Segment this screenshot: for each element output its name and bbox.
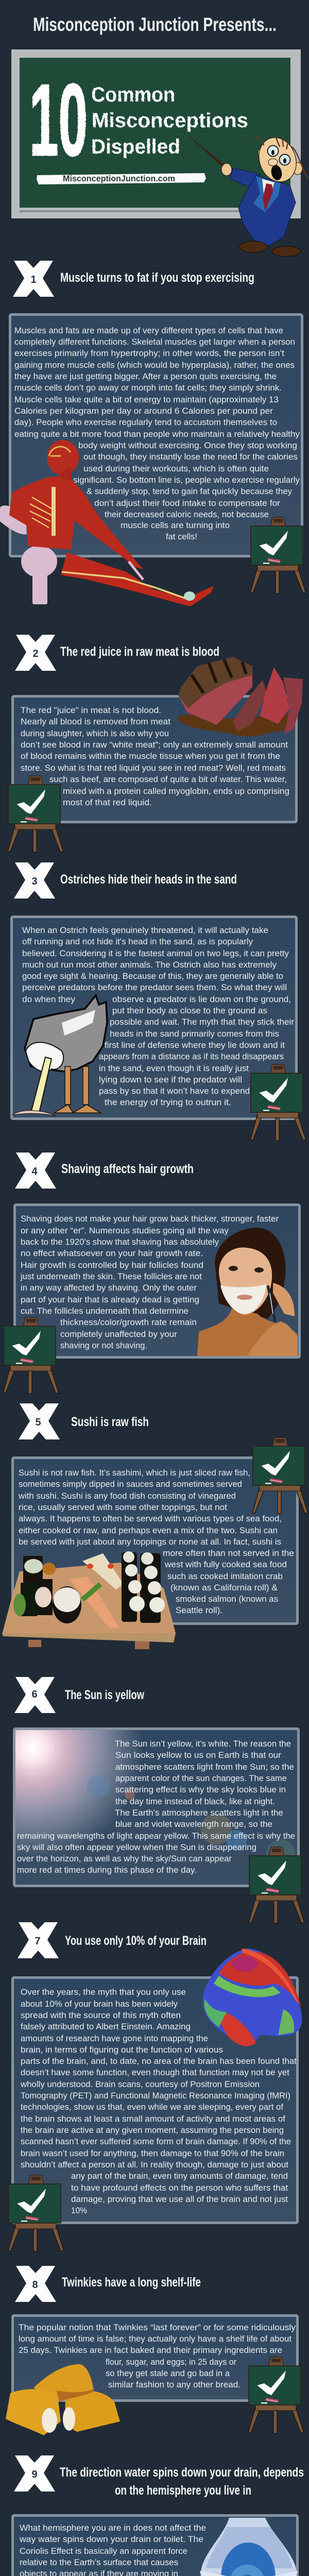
board heading bbox=[91, 83, 248, 158]
text 3: When an Ostrich feels genuinely threatened, it will actually take bbox=[22, 925, 268, 935]
text 1: Muscles and fats are made up of very different types of cells that have bbox=[14, 326, 283, 335]
text 8: so they get stale and go bad in a bbox=[106, 2368, 230, 2378]
text 4: completely unaffected by your bbox=[60, 1329, 177, 1339]
image: sun glare bbox=[15, 1730, 295, 1855]
text 2: Nearly all blood is removed from meat bbox=[21, 717, 170, 726]
text 7: shouldn’t affect a person at all. In reality though, damage to just about bbox=[21, 2160, 288, 2170]
board heading: Dispelled bbox=[91, 135, 180, 158]
text 1: eating quite a bit more food than people who maintain a relatively healthy bbox=[14, 429, 300, 439]
text 6: Sun looks yellow to us on Earth is that our bbox=[115, 1750, 281, 1760]
text 1: exercises primarily from hypertrophy; in other words, the person isn’t bbox=[14, 348, 284, 358]
panel 4 bbox=[14, 1205, 300, 1357]
panel 3 bbox=[11, 917, 297, 1119]
text 7: Tomography (PET) and Functional Magnetic Resonance Imaging (fMRI) bbox=[21, 2091, 290, 2100]
icon: professor with pointer bbox=[189, 132, 308, 257]
icon: easel check 2 bbox=[8, 776, 63, 852]
text 3: good eye sight & hearing. Because of this, they are generally able to bbox=[22, 971, 283, 981]
x mark 2: 2 bbox=[32, 648, 39, 659]
text 7: the brain are active at any given moment, assuming the person being bbox=[21, 2125, 284, 2135]
text 5: always. It happens to often be served with various types of sea food, bbox=[19, 1514, 282, 1523]
board number 10: 10 bbox=[29, 63, 88, 177]
text 1: significant. So bottom line is, people who exercise regularly bbox=[73, 475, 300, 485]
section 3: ostriches bbox=[11, 862, 306, 1141]
icon: easel check 6 bbox=[249, 1847, 304, 1923]
icon: easel check 7 bbox=[8, 2175, 64, 2251]
text 8 bbox=[19, 2323, 296, 2389]
text 6: more red at times during this phase of the day. bbox=[17, 1865, 197, 1875]
text 1: day). People who exercise regularly tend to accustom themselves to bbox=[14, 417, 277, 427]
panel 2 bbox=[12, 697, 297, 822]
text 3: the energy of trying to outrun it. bbox=[105, 1097, 231, 1107]
text 7: falsely attributed to Albert Einstein. Amazing bbox=[21, 2022, 191, 2031]
text 2: mixed with a protein called myoglobin, ends up comprising bbox=[63, 786, 289, 796]
panel 8 bbox=[12, 2315, 298, 2401]
x mark 1 bbox=[13, 261, 54, 297]
text 6: over the horizon, as well as why the sky/Sun can appear bbox=[17, 1854, 232, 1863]
text 6: scattering effect is why the sky looks blue in bbox=[115, 1785, 286, 1794]
text 5: be served with just about any toppings or none at all. In fact, sushi is bbox=[19, 1537, 281, 1547]
icon: easel check 3 bbox=[250, 1064, 306, 1141]
x mark 4: 4 bbox=[31, 1166, 38, 1177]
text 1: fat cells! bbox=[166, 532, 197, 541]
image: woman shaving bbox=[197, 1228, 298, 1356]
text 7: the brain shows at least a small amount of activity and most areas of bbox=[21, 2114, 285, 2124]
text 5: rice, usually served with some other toppings, but not bbox=[19, 1502, 227, 1512]
image: sushi board bbox=[2, 1551, 176, 1649]
x mark 6 bbox=[14, 1677, 56, 1713]
x mark 1: 1 bbox=[30, 274, 37, 285]
text 7: Over the years, the myth that you only use bbox=[21, 1987, 186, 1997]
section 7: brain bbox=[8, 1922, 302, 2251]
text 1: & suddenly stop, tend to gain fat quickly because they bbox=[87, 486, 292, 496]
text 2: The red "juice" in meat is not blood. bbox=[21, 705, 161, 715]
text 7: damage, proving that we use all of the brain and not just bbox=[71, 2194, 288, 2204]
text 6: apparent color of the sun changes. The same bbox=[115, 1773, 287, 1783]
section 5: sushi bbox=[2, 1403, 308, 1649]
x mark 7: 7 bbox=[35, 1936, 41, 1947]
icon: easel check 5 bbox=[252, 1437, 308, 1514]
x mark 9: 9 bbox=[31, 2469, 38, 2480]
section 6: sun bbox=[9, 1677, 304, 1923]
text 3: in the sand, even though it is really just bbox=[99, 1063, 249, 1073]
text 4: cut. The follicles underneath that determine bbox=[21, 1306, 188, 1316]
x mark 5: 5 bbox=[35, 1417, 41, 1428]
heading 1: Muscle turns to fat if you stop exercising bbox=[60, 270, 254, 285]
x mark 5 bbox=[19, 1403, 60, 1439]
x mark 6: 6 bbox=[31, 1689, 38, 1700]
text 2: most of that red liquid. bbox=[63, 798, 152, 807]
text 8: 25 days. Twinkies are in fact baked and their primary ingredients are bbox=[19, 2345, 282, 2355]
text 3: appears from a distance as if its head disappears bbox=[99, 1052, 284, 1061]
heading 5: Sushi is raw fish bbox=[71, 1415, 149, 1429]
text 3: off running and not hide it's head in the sand, as is popularly bbox=[22, 937, 253, 946]
panel 6 bbox=[14, 1729, 299, 1886]
panel 5 bbox=[12, 1458, 298, 1624]
text 4: thickness/color/growth rate remain bbox=[60, 1317, 197, 1327]
heading 4: Shaving affects hair growth bbox=[61, 1162, 194, 1176]
text 3: first line of defense where they lie down and it bbox=[105, 1040, 285, 1050]
text 5: such as cooked imitation crab bbox=[167, 1571, 283, 1581]
text 9: relative to the Earth’s surface that causes bbox=[20, 2557, 178, 2567]
x mark 3 bbox=[14, 862, 55, 899]
text 3: do when they bbox=[22, 994, 75, 1004]
text 7: any part of the brain, even tiny amounts of damage, tend bbox=[71, 2171, 288, 2181]
text 5: with sushi. Sushi is any food dish consisting of vinegared bbox=[18, 1491, 236, 1501]
text 7: wholly understood. Brain scans, courtesy of Positron Emission bbox=[20, 2079, 260, 2089]
text 7: scanned hasn’t ever suffered some form of brain damage. If 90% of the bbox=[21, 2137, 291, 2146]
heading 7: You use only 10% of your Brain bbox=[65, 1934, 207, 1948]
text 6: blue and violet wavelength range, so the bbox=[115, 1819, 272, 1829]
text 1: out though, they instantly lose the need for the calories bbox=[83, 452, 298, 462]
text 4: in any way affected by shaving. Only the outer bbox=[21, 1283, 197, 1293]
text 7: doesn’t have some function, even though that function may not be yet bbox=[21, 2067, 289, 2077]
text 6: atmosphere scatters light from the Sun; so the bbox=[115, 1762, 294, 1772]
text 3: lying down to see if the predator will bbox=[99, 1075, 242, 1084]
text 5: west with fully cooked sea food bbox=[164, 1560, 287, 1569]
text 3: perceive predators before the predator sees them. So what they will bbox=[22, 982, 287, 992]
text 3: heads in the sand primarily comes from this bbox=[110, 1029, 279, 1039]
section 4: shaving bbox=[3, 1153, 300, 1394]
chalkboard header bbox=[11, 49, 301, 218]
x mark 8: 8 bbox=[32, 2279, 38, 2291]
text 5: either cooked or raw, and perhaps even a mix of the two. Sushi can bbox=[19, 1526, 278, 1535]
text 4: Hair growth is controlled by hair follicles found bbox=[21, 1260, 203, 1270]
text 5: (known as California roll) & bbox=[170, 1583, 278, 1592]
text 6 bbox=[17, 1739, 295, 1875]
text 7: about 10% of your brain has been widely bbox=[21, 1999, 178, 2009]
text 6: remaining wavelengths of light appear yellow. This same effect is why the bbox=[17, 1831, 295, 1841]
section 2: red juice bbox=[8, 635, 303, 852]
x mark 9 bbox=[14, 2455, 55, 2492]
image: twinkies bbox=[6, 2364, 120, 2435]
text 7: amounts of research have gone into mapping the bbox=[21, 2033, 208, 2043]
text 4: shaving or not shaving. bbox=[60, 1341, 147, 1350]
icon: easel check 4 bbox=[3, 1317, 59, 1394]
section 8: twinkies bbox=[6, 2266, 304, 2435]
text 6: The Sun isn’t yellow, it’s white. The reason the bbox=[115, 1739, 291, 1749]
text 5: Sushi is not raw fish. It’s sashimi, which is just sliced raw fish, bbox=[19, 1468, 250, 1478]
text 1: don’t adjust their food intake to compensate for bbox=[94, 498, 280, 508]
heading 9 bbox=[60, 2465, 304, 2498]
icon: easel check 8 bbox=[248, 2357, 304, 2433]
text 5: more often than not served in the bbox=[163, 1548, 294, 1558]
text 3: pass by so that it won’t have to expend bbox=[99, 1086, 250, 1096]
text 4: back to the 1920's show that shaving has absolutely bbox=[21, 1237, 219, 1247]
text 4: or any other “er”. Numerous studies going all the way bbox=[21, 1226, 229, 1235]
text 6: The Earth’s atmosphere scatters light in the bbox=[115, 1808, 283, 1818]
text 4: just underneath the skin. These follicles are not bbox=[20, 1272, 202, 1281]
text 9: way water spins down your drain or toilet. The bbox=[19, 2534, 203, 2544]
x mark 4 bbox=[15, 1153, 56, 1189]
text 2: during slaughter, which is also why you bbox=[21, 728, 169, 738]
text 1: they have are just getting bigger. After a person quits exercising, the bbox=[14, 371, 277, 381]
text 8: The popular notion that Twinkies “last forever” or for some ridiculously bbox=[19, 2323, 296, 2332]
text 3 bbox=[22, 925, 294, 1107]
image: sliced steak bbox=[177, 657, 303, 736]
text 5: Seattle roll). bbox=[176, 1605, 222, 1615]
heading 2: The red juice in raw meat is blood bbox=[60, 645, 219, 659]
text 8: long amount of time is false; they actually only have a shelf life of about bbox=[19, 2334, 291, 2344]
image: ostrich with head in sand bbox=[12, 995, 107, 1116]
text 1: their decreased caloric needs, not because bbox=[105, 510, 269, 519]
text 3: observe a predator is lie down on the ground, bbox=[112, 994, 291, 1004]
text 7: 10% bbox=[71, 2206, 87, 2215]
panel 7 bbox=[12, 1977, 298, 2223]
text 6: the day time instead of black, like at night. bbox=[115, 1797, 275, 1806]
text 6: sky will also often appear yellow when the Sun is disappearing bbox=[17, 1842, 256, 1852]
text 3: much out run most other animals. The Ostrich also has extremely bbox=[22, 960, 277, 970]
text 2 bbox=[21, 705, 289, 807]
text 8: similar fashion to any other bread. bbox=[108, 2380, 241, 2389]
heading 8: Twinkies have a long shelf-life bbox=[62, 2275, 201, 2290]
text 1: gaining more muscle cells (which would be hyperplasia), rather, the ones bbox=[14, 360, 295, 370]
board heading: Misconceptions bbox=[92, 109, 248, 132]
text 8: flour, sugar, and eggs; in 25 days or bbox=[106, 2357, 236, 2367]
text 1 bbox=[14, 326, 300, 541]
text 7: brain wasn’t used for anything, then damage to that 90% of the brain bbox=[21, 2148, 284, 2158]
text 1: completely different functions. Skeletal muscles get larger when a person bbox=[14, 337, 295, 347]
text 1: muscle cells are turning into bbox=[121, 520, 230, 530]
x mark 8 bbox=[15, 2266, 56, 2302]
text 5 bbox=[18, 1468, 294, 1615]
text 2: such as beef, are composed of quite a bit of water. This water, bbox=[49, 774, 287, 784]
text 2: don’t see blood in raw “white meat”; only an extremely small amount bbox=[21, 740, 288, 750]
text 3: possible and wait. The myth that they stick their bbox=[110, 1017, 294, 1027]
text 9 bbox=[19, 2523, 289, 2576]
chalk stripe with website bbox=[37, 173, 206, 184]
text 1: muscle cells don’t go away or morph into fat cells; they simply shrink. bbox=[14, 383, 282, 393]
text 2: store. So what is that red liquid you see in red meat? Well, red meats bbox=[21, 763, 286, 773]
image: muscle anatomy figure bbox=[0, 440, 214, 606]
x mark 2 bbox=[15, 635, 56, 671]
text 2: of blood remains within the muscle tissue when you get it from the bbox=[21, 751, 280, 761]
section 9: drain bbox=[10, 2455, 304, 2576]
text 7: parts of the brain, and, to date, no area of the brain has been found that bbox=[21, 2056, 297, 2066]
text 1: Calories per kilogram per day or around 6 Calories per pound per bbox=[14, 406, 273, 416]
text 5: smoked salmon (known as bbox=[176, 1594, 278, 1604]
text 1: Muscle cells take quite a bit of energy to maintain (approximately 13 bbox=[14, 395, 279, 404]
text 7 bbox=[20, 1987, 297, 2215]
text 4: no effect whatsoever on your hair growth rate. bbox=[21, 1248, 203, 1258]
text 3: believed. Considering it is the fastest animal on two legs, it can pretty bbox=[22, 948, 289, 958]
image: toilet bowl bbox=[200, 2518, 298, 2576]
text 9: Coriolis Effect is basically an apparent force bbox=[20, 2546, 187, 2556]
text 3: put their body as close to the ground as bbox=[112, 1006, 267, 1015]
x mark 7 bbox=[18, 1922, 59, 1958]
text 7: to have profound effects on the person who suffers that bbox=[71, 2183, 288, 2193]
text 7: brain, in terms of figuring out the function of various bbox=[21, 2045, 223, 2055]
text 1: body weight without exercising. Once they stop working bbox=[78, 440, 297, 450]
text 5: sometimes simply dipped in sauces and sometimes served bbox=[19, 1479, 242, 1489]
text 4 bbox=[20, 1214, 279, 1350]
icon: easel check 1 bbox=[250, 517, 306, 594]
text 4: Shaving does not make your hair grow back thicker, stronger, faster bbox=[21, 1214, 279, 1224]
section 1: muscle bbox=[0, 261, 306, 606]
text 4: part of your hair that is already dead is getting bbox=[21, 1295, 199, 1304]
chalk stripe with website: MisconceptionJunction.com bbox=[63, 174, 175, 183]
heading 9: on the hemisphere you live in bbox=[115, 2483, 251, 2498]
heading 6: The Sun is yellow bbox=[65, 1688, 144, 1702]
heading 3: Ostriches hide their heads in the sand bbox=[60, 872, 237, 887]
text 7: spread with the source of this myth often bbox=[21, 2010, 181, 2020]
panel 9 bbox=[12, 2515, 298, 2576]
panel 1 bbox=[10, 314, 302, 556]
text 1: used during their workouts, which is often quite bbox=[83, 464, 269, 473]
text 9: What hemisphere you are in does not affect the bbox=[20, 2523, 206, 2533]
board heading: Common bbox=[91, 83, 175, 106]
text 7: technologies, show us that, even while we are sleeping, every part of bbox=[21, 2102, 283, 2112]
x mark 3: 3 bbox=[31, 876, 38, 887]
image: colored brain scan bbox=[203, 1948, 302, 2046]
